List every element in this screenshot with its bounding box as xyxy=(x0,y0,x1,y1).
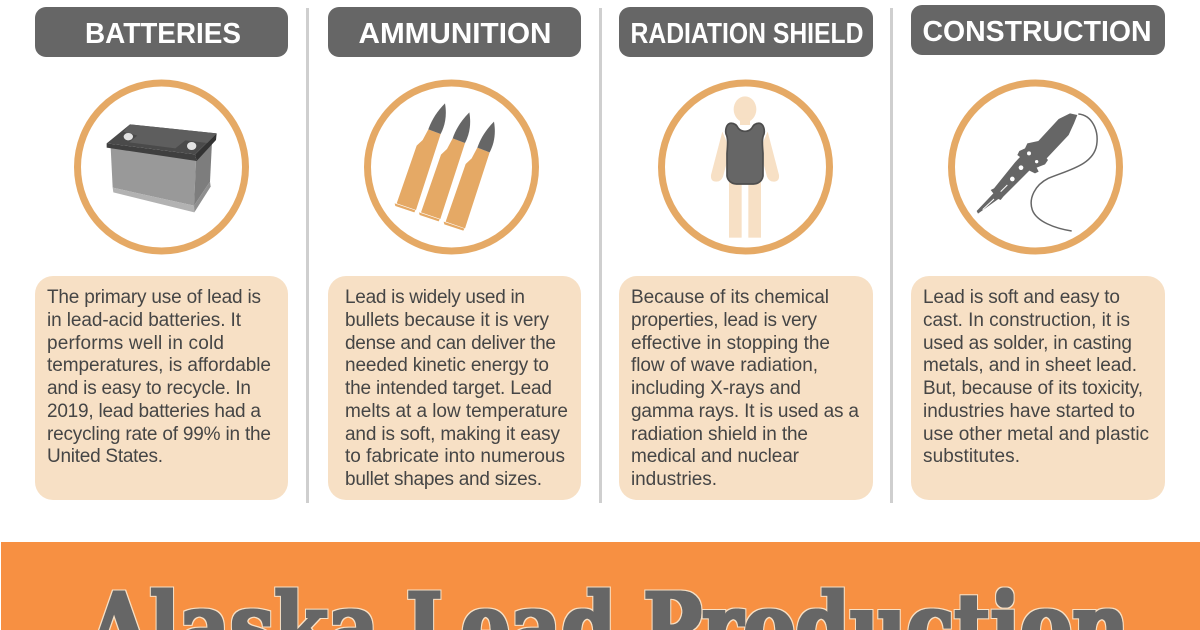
text block: ammunition: bullets because it is very xyxy=(345,310,550,331)
text block: batteries: 2019, lead batteries had a xyxy=(47,401,261,422)
text block: ammunition: melts at a low temperature xyxy=(345,401,568,422)
text block: ammunition: Lead is widely used in xyxy=(345,287,525,308)
text block: radiation shield: industries. xyxy=(631,469,717,490)
text block: radiation shield: effective in stopping the xyxy=(631,333,830,354)
text block: batteries: in lead-acid batteries. It xyxy=(47,310,242,331)
heading: batteries xyxy=(35,7,288,57)
panel: ammunition xyxy=(328,7,581,500)
text block: construction: use other metal and plastic xyxy=(923,424,1149,445)
text block: batteries xyxy=(35,276,288,500)
text block: construction: substitutes. xyxy=(923,446,1020,467)
text block: radiation shield: Because of its chemical xyxy=(631,287,829,308)
text block: batteries: performs well in cold xyxy=(47,333,224,354)
text block: ammunition: and is soft, making it easy xyxy=(345,424,560,445)
text block: construction: cast. In construction, it is xyxy=(923,310,1130,331)
icon: car battery xyxy=(78,83,246,251)
text block: construction: Lead is soft and easy to xyxy=(923,287,1120,308)
text block: ammunition xyxy=(328,276,581,500)
panel: radiation shield xyxy=(619,7,873,500)
heading: ammunition: AMMUNITION xyxy=(358,18,552,50)
panel: batteries xyxy=(35,7,288,500)
text block: radiation shield: flow of wave radiation, xyxy=(631,355,818,376)
text block: construction: industries have started to xyxy=(923,401,1135,422)
text block: radiation shield: properties, lead is very xyxy=(631,310,818,331)
text block: construction: metals, and in sheet lead. xyxy=(923,355,1137,376)
text block: ammunition: bullet shapes and sizes. xyxy=(345,469,542,490)
panel: construction xyxy=(911,5,1165,500)
text block: ammunition: needed kinetic energy to xyxy=(345,355,549,376)
text block: ammunition: dense and can deliver the xyxy=(345,333,556,354)
text block: radiation shield: radiation shield in the xyxy=(631,424,808,445)
text block: radiation shield xyxy=(619,276,873,500)
heading: construction xyxy=(911,5,1165,55)
icon: person with lead vest xyxy=(662,83,830,251)
heading: batteries: BATTERIES xyxy=(85,18,241,50)
icon: soldering iron xyxy=(952,83,1120,251)
text block: ammunition: to fabricate into numerous xyxy=(345,446,565,467)
text block: radiation shield: gamma rays. It is used as a xyxy=(631,401,859,422)
heading: radiation shield xyxy=(619,7,873,57)
text block: batteries: temperatures, is affordable xyxy=(47,355,271,376)
text block: batteries: and is easy to recycle. In xyxy=(47,378,251,399)
text block: construction xyxy=(911,276,1165,500)
text block: batteries: United States. xyxy=(47,446,163,467)
text block: batteries: The primary use of lead is xyxy=(47,287,261,308)
text block: radiation shield: medical and nuclear xyxy=(631,446,800,467)
heading: construction: CONSTRUCTION xyxy=(922,16,1152,48)
heading: radiation shield: RADIATION SHIELD xyxy=(630,18,864,50)
banner: Alaska Lead Production xyxy=(1,542,1200,630)
text block: construction: But, because of its toxicity, xyxy=(923,378,1143,399)
text block: radiation shield: including X-rays and xyxy=(631,378,801,399)
icon: bullets xyxy=(368,83,536,251)
text block: construction: used as solder, in casting xyxy=(923,333,1132,354)
text block: batteries: recycling rate of 99% in the xyxy=(47,424,271,445)
heading: ammunition xyxy=(328,7,581,57)
text block: ammunition: the intended target. Lead xyxy=(345,378,552,399)
